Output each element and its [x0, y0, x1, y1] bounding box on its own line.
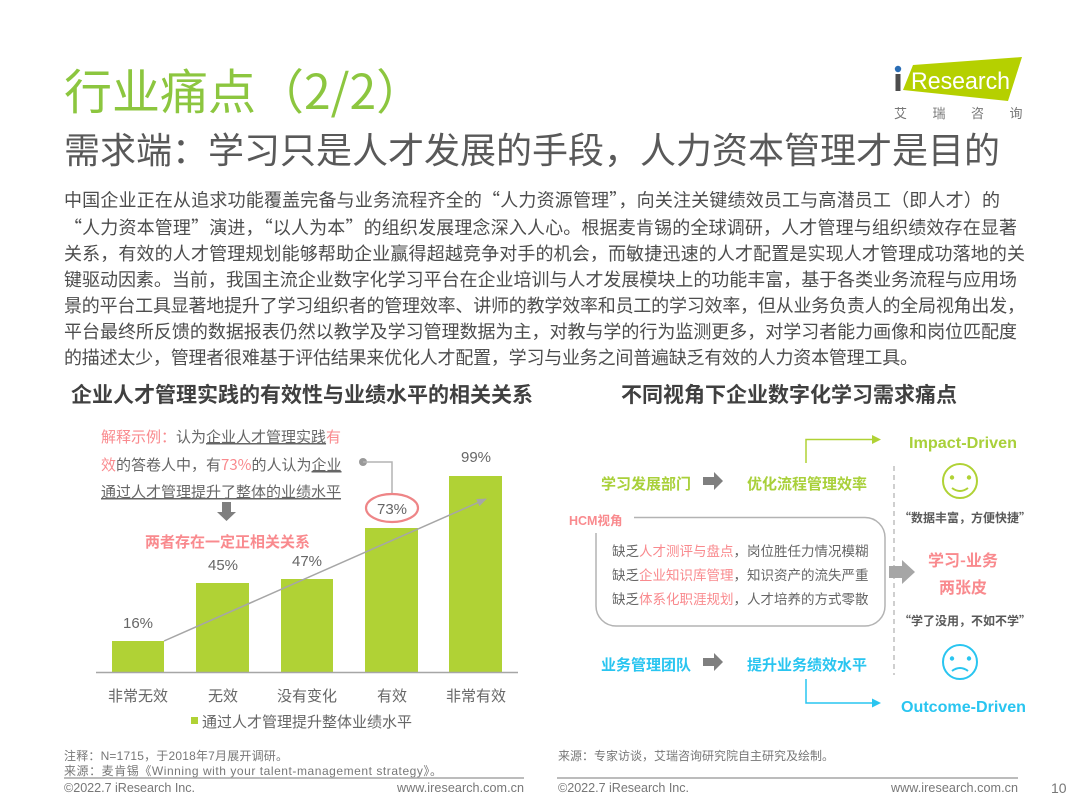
subtitle: 需求端：学习只是人才发展的手段，人力资本管理才是目的	[64, 122, 1000, 174]
axis	[96, 672, 518, 674]
body text: 平台最终所反馈的数据报表仍然以教学及学习管理数据为主，对教与学的行为监测更多，对学习者能力画像和岗位匹配度	[64, 318, 1017, 344]
body text: “人力资本管理”演进，“以人为本”的组织发展理念深入人心。根据麦肯锡的全球调研，人才管理与组织绩效存在显著	[64, 214, 1017, 240]
notes left: 来源：麦肯锡《Winning with your talent-management strategy》。	[64, 763, 442, 778]
value labels: 47%	[292, 553, 322, 570]
bars	[112, 476, 502, 672]
connector: 73% highlight	[359, 458, 418, 522]
body text	[64, 186, 1025, 370]
legend: 通过人才管理提升整体业绩水平	[202, 711, 412, 732]
row: business team	[601, 653, 867, 675]
row: learning department: 学习发展部门	[601, 473, 691, 494]
arrow: grey to conclusion	[889, 560, 915, 584]
label: outcome-driven: Outcome-Driven	[901, 699, 1026, 716]
category labels: 无效	[208, 685, 238, 706]
arrow: outcome	[806, 679, 881, 708]
footer left	[64, 781, 524, 795]
title: 行业痛点（2/2）	[64, 53, 424, 123]
value labels: 45%	[208, 557, 238, 574]
value labels: 73%	[377, 501, 407, 518]
icon: smile	[943, 464, 977, 498]
body text: 关系，有效的人才管理规划能够帮助企业赢得超越竞争对手的机会，而敏捷迅速的人才配置是实现人才管理成功落地的关	[64, 240, 1025, 266]
footer right: www.iresearch.com.cn	[890, 781, 1018, 795]
category labels: 有效	[377, 685, 407, 706]
quote positive: “数据丰富，方便快捷”	[899, 509, 1031, 526]
logo: iResearch: Research	[911, 68, 1010, 95]
divider dashed	[893, 466, 895, 675]
callout: explanation	[101, 426, 342, 502]
callout conclusion: 两者存在一定正相关关系	[145, 531, 310, 552]
footer rules	[64, 777, 1018, 779]
row: business team: 业务管理团队	[601, 654, 691, 675]
HCM lines: 缺乏企业知识库管理，知识资产的流失严重	[612, 564, 868, 584]
value labels	[123, 449, 491, 632]
label: HCM: HCM视角	[569, 513, 622, 528]
callout: explanation: 通过人才管理提升了整体的业绩水平	[101, 481, 341, 502]
category labels: 没有变化	[277, 685, 337, 706]
callout: explanation: 解释示例：认为企业人才管理实践有	[101, 426, 341, 447]
body text: 中国企业正在从追求功能覆盖完备与业务流程齐全的“人力资源管理”，向关注关键绩效员工与高潜员工（即人才）的	[64, 186, 1000, 212]
row: learning department	[601, 472, 867, 494]
bar chart	[96, 449, 518, 732]
footer left: ©2022.7 iResearch Inc.	[64, 781, 195, 795]
footer left: www.iresearch.com.cn	[396, 781, 524, 795]
conclusion: 两张皮	[939, 574, 987, 598]
row: business team: 提升业务绩效水平	[747, 654, 867, 675]
notes left	[64, 748, 442, 778]
body text: 的描述太少，管理者很难基于评估结果来优化人才配置，学习与业务之间普遍缺乏有效的人力资本管理工具。	[64, 344, 918, 370]
footer right: ©2022.7 iResearch Inc.	[558, 781, 689, 795]
category labels: 非常无效	[108, 685, 168, 706]
HCM lines: 缺乏体系化职涯规划，人才培养的方式零散	[612, 588, 869, 608]
value labels: 99%	[461, 449, 491, 466]
notes left: 注释：N=1715，于2018年7月展开调研。	[64, 748, 288, 763]
quote negative: “学了没用，不如不学”	[899, 612, 1031, 629]
arrow: down	[217, 502, 236, 521]
page number: 10	[1051, 780, 1067, 796]
callout: explanation: 效的答卷人中，有73%的人认为企业	[101, 454, 342, 475]
notes right: 来源：专家访谈，艾瑞咨询研究院自主研究及绘制。	[558, 747, 834, 764]
logo: iResearch: 艾瑞咨询	[894, 103, 1048, 122]
logo: iResearch	[894, 57, 1048, 122]
value labels: 16%	[123, 615, 153, 632]
heading: right panel: 不同视角下企业数字化学习需求痛点	[621, 379, 957, 409]
body text: 景的平台工具显著地提升了学习组织者的管理效率、讲师的教学效率和员工的学习效率，但从业务负责人的全局视角出发，	[64, 292, 1025, 318]
HCM lines: 缺乏人才测评与盘点，岗位胜任力情况模糊	[612, 540, 868, 560]
conclusion	[928, 547, 998, 598]
icon: frown	[943, 645, 977, 679]
arrow: impact	[806, 435, 881, 463]
category labels: 非常有效	[446, 685, 506, 706]
panel: HCM	[596, 518, 885, 626]
trend arrow	[164, 499, 486, 641]
body text: 键驱动因素。当前，我国主流企业数字化学习平台在企业培训与人才发展模块上的功能丰富，基于各类业务流程与应用场	[64, 266, 1017, 292]
HCM lines	[612, 540, 869, 608]
footer right	[558, 781, 1018, 795]
conclusion: 学习-业务	[928, 547, 998, 571]
category labels	[108, 685, 506, 706]
heading: left chart: 企业人才管理实践的有效性与业绩水平的相关关系	[71, 379, 533, 409]
label: impact-driven: Impact-Driven	[909, 435, 1017, 452]
row: learning department: 优化流程管理效率	[747, 473, 867, 494]
